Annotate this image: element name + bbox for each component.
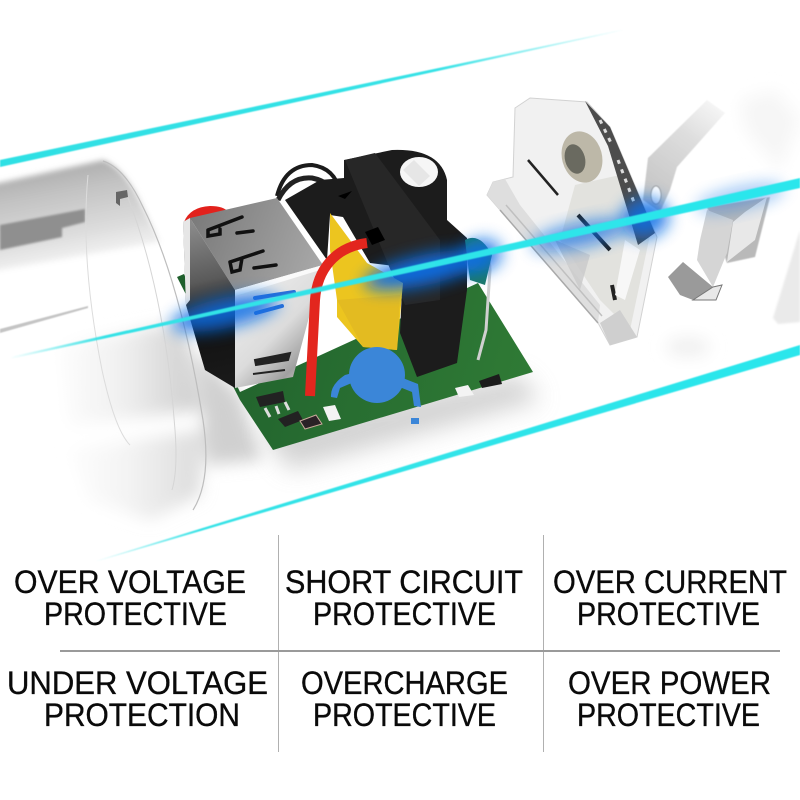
feature: over voltage protective: OVER VOLTAGE: [14, 564, 246, 600]
feature: over power protective: PROTECTIVE: [577, 697, 760, 733]
board shadow: [260, 375, 540, 470]
feature: over current protective: PROTECTIVE: [577, 596, 760, 632]
grid divider lines: [60, 535, 780, 752]
cyan light beam: bottom: [95, 345, 800, 562]
bent lead: [470, 240, 490, 360]
transparent cylinder shell: [0, 160, 262, 520]
feature: over current protective: [553, 564, 787, 632]
feature: over power protective: OVER POWER: [568, 665, 771, 701]
red wire: [310, 243, 367, 396]
ground shadow below plate: [666, 337, 710, 357]
metal contact brackets: [643, 90, 800, 324]
capacitor loops: [277, 165, 340, 196]
red wire dome: [184, 206, 228, 222]
feature: short circuit protective: [285, 564, 523, 632]
blue glow along middle beam: [168, 178, 786, 340]
cyan light beam: top: [0, 30, 625, 167]
feature: overcharge protective: [301, 665, 508, 733]
clear plastic plate: [487, 98, 657, 345]
circuit board assembly: [177, 150, 533, 450]
feature: over voltage protective: [14, 564, 246, 632]
USB connector: [183, 198, 323, 388]
yellow transformer core: [330, 213, 403, 350]
shell highlight band: [0, 240, 183, 334]
surface mount components: [256, 374, 502, 429]
feature: over voltage protective: PROTECTIVE: [44, 596, 227, 632]
USB slot cutouts: [208, 217, 276, 272]
feature: under voltage protection: PROTECTION: [44, 697, 240, 733]
cyan light beam: middle: [10, 178, 800, 359]
feature: overcharge protective: OVERCHARGE: [301, 665, 508, 701]
green PCB: [177, 274, 533, 450]
feature: overcharge protective: PROTECTIVE: [313, 697, 496, 733]
blue disc capacitor: [331, 347, 421, 424]
feature: over power protective: [568, 665, 771, 733]
shell lower shading: [60, 322, 262, 520]
feature: short circuit protective: SHORT CIRCUIT: [285, 564, 523, 600]
feature: under voltage protection: UNDER VOLTAGE: [7, 665, 268, 701]
black capacitor and transformer: [277, 150, 467, 377]
feature: under voltage protection: [7, 665, 268, 733]
feature: short circuit protective: PROTECTIVE: [313, 596, 496, 632]
